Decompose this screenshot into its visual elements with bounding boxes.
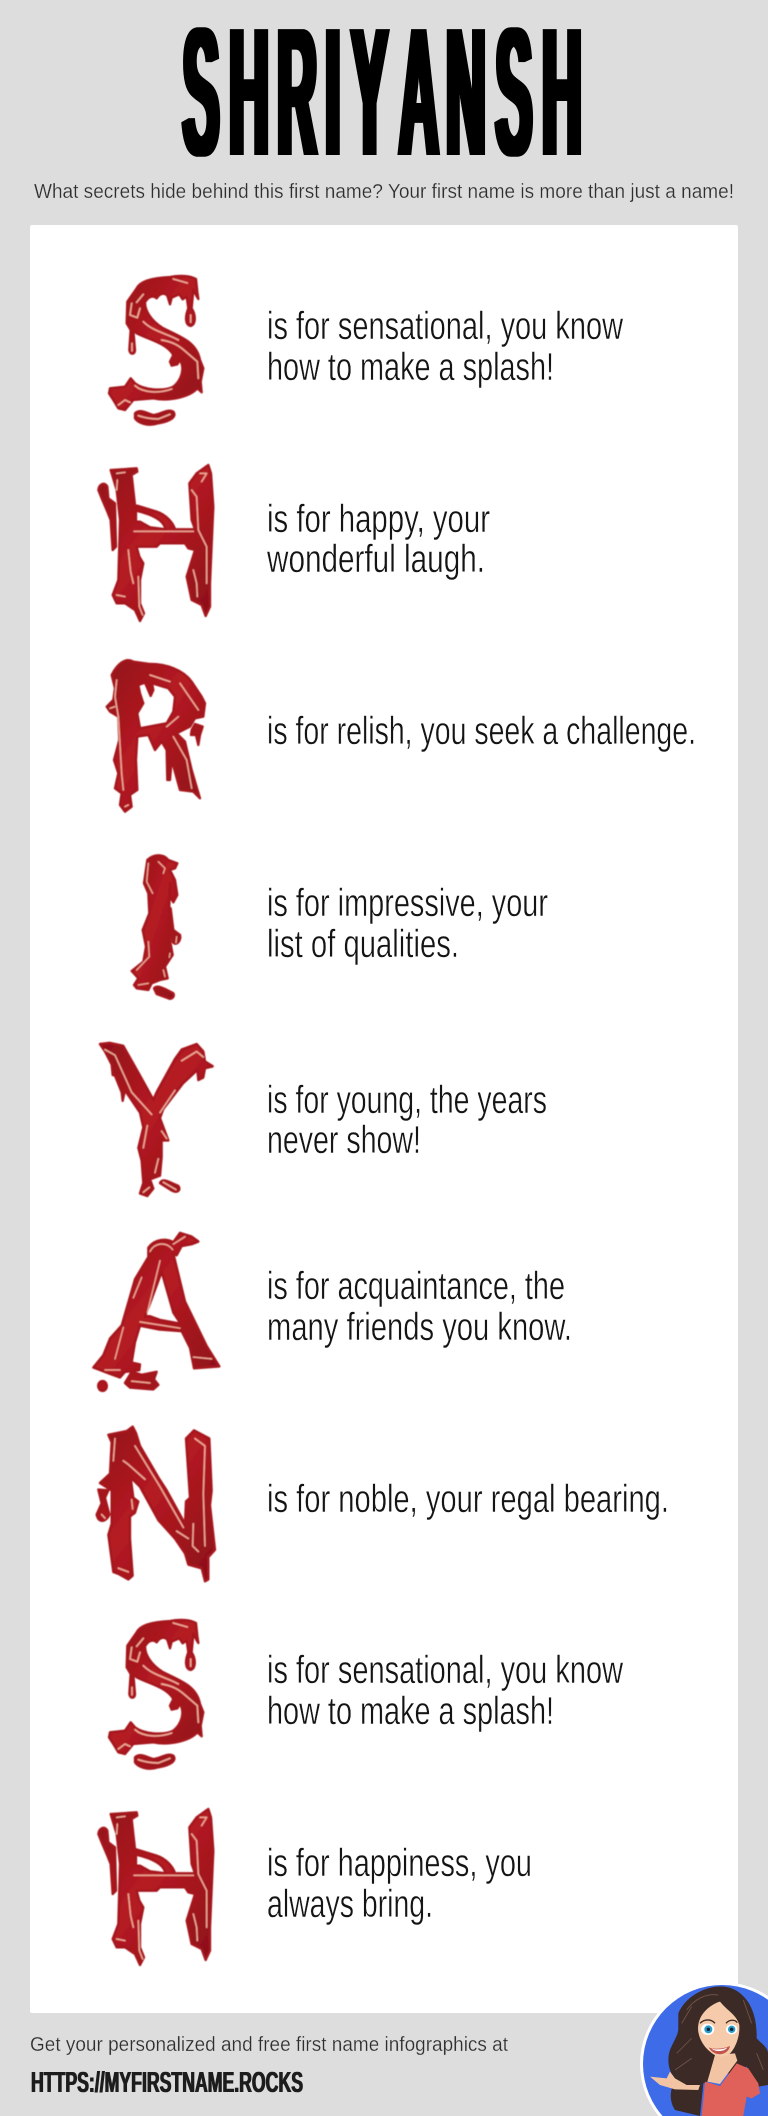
text: I: is for impressive, your	[267, 882, 548, 925]
subtitle: What secrets hide behind this first name? Your first name is more than just a name!	[34, 181, 734, 203]
row: A acquaintance	[93, 1233, 572, 1391]
text: H: is for happy, your	[267, 498, 490, 541]
text: Y: is for young, the years	[267, 1079, 547, 1122]
icon: blood letter S	[109, 276, 203, 425]
row: Y young	[100, 1043, 547, 1196]
icon: blood letter I	[132, 855, 180, 999]
footer url: HTTPS://MYFIRSTNAME.ROCKS	[31, 2067, 303, 2099]
row: R relish	[107, 660, 696, 812]
panel: letter list	[30, 225, 738, 2013]
row: S sensational repeat	[109, 1620, 624, 1769]
icon: blood letter H	[98, 465, 213, 621]
text: H happiness: is for happiness, you	[267, 1842, 532, 1885]
avatar	[640, 1982, 768, 2116]
icon: blood letter H repeat	[98, 1809, 213, 1965]
text: A: many friends you know.	[267, 1306, 572, 1349]
text: H happiness: always bring.	[267, 1883, 433, 1926]
text: S: is for sensational, you know	[267, 305, 624, 348]
footer text: Get your personalized and free first name infographics at	[30, 2034, 508, 2056]
text: S repeat: how to make a splash!	[267, 1690, 554, 1733]
row: I impressive	[132, 855, 548, 999]
text: Y: never show!	[267, 1119, 421, 1162]
text: S: how to make a splash!	[267, 346, 554, 389]
row: H happiness	[98, 1809, 532, 1965]
text: S repeat: is for sensational, you know	[267, 1649, 624, 1692]
text: H: wonderful laugh.	[266, 538, 485, 581]
row: N noble	[97, 1427, 669, 1581]
title	[183, 0, 582, 194]
icon: blood letter N	[97, 1427, 215, 1581]
row: H happy	[98, 465, 490, 621]
icon: blood letter Y	[100, 1043, 213, 1196]
text: A: is for acquaintance, the	[267, 1265, 565, 1308]
row: S sensational	[109, 276, 624, 425]
text: I: list of qualities.	[267, 923, 459, 966]
icon: blood letter R	[107, 660, 205, 812]
icon: blood letter A	[93, 1233, 219, 1391]
icon: blood letter S repeat	[109, 1620, 203, 1769]
